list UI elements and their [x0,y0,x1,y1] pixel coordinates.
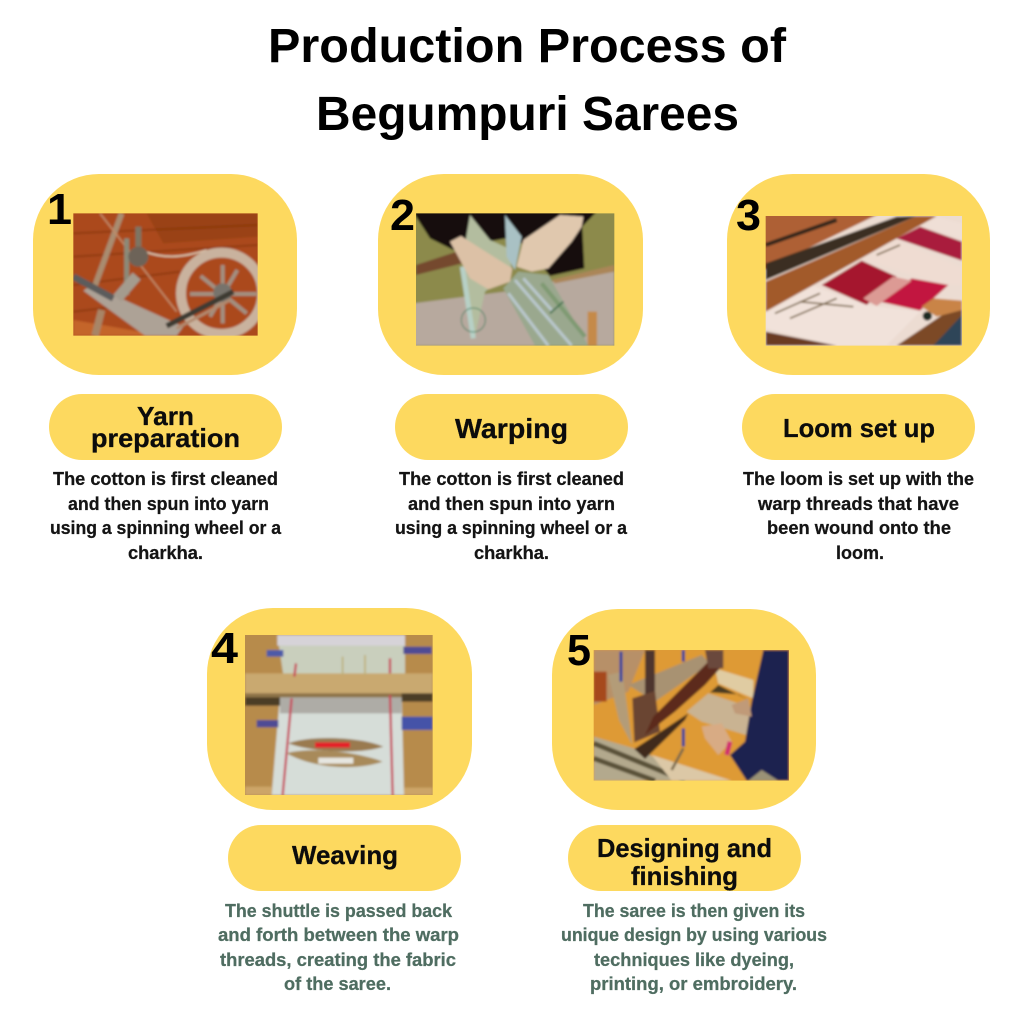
text: step 3 description: The loom is set up with the [743,469,974,489]
panel: step 1 yarn preparation [33,174,297,563]
card: step 4 [207,608,472,810]
panel: step 4 weaving [207,608,472,994]
photo: hands warping threads [413,210,617,348]
pill: Yarn preparation: Yarn [137,401,194,431]
panel: step 2 warping [378,174,643,563]
panel: step 5 designing and finishing [552,609,827,994]
pill: Weaving: Weaving [292,840,398,870]
text: step 2 description: charkha. [474,543,549,563]
number 2: 2 [390,191,415,240]
text: step 2 description: using a spinning wheel or a [395,518,628,538]
pill: Warping: Warping [455,413,568,444]
text: step 1 description: and then spun into yarn [68,494,269,514]
title: Begumpuri Sarees [316,88,739,141]
number 1: 1 [47,185,72,234]
pill: Designing and finishing: finishing [631,861,738,891]
pill: Loom set up: Loom set up [783,413,935,443]
text: step 4 description: threads, creating the fabric [220,950,456,970]
photo: weaver at wooden loom [592,648,792,782]
card: step 1 [33,174,297,375]
card: step 3 [727,174,990,375]
photo: loom with red and white cloth [763,213,965,348]
panel: step 3 loom set up [727,174,990,563]
text: step 1 description: using a spinning wheel or a [50,518,282,538]
text: step 3 description [743,469,974,563]
number 5: 5 [567,626,591,675]
number 4: 4 [211,624,239,673]
text: step 5 description: The saree is then given its [583,901,805,921]
pill: Yarn preparation [49,394,282,460]
text: step 3 description: loom. [836,543,884,563]
card: step 5 [552,609,816,810]
pill: Designing and finishing: Designing and [597,833,772,863]
text: step 5 description: printing, or embroidery. [590,974,797,994]
text: step 1 description: charkha. [128,543,203,563]
photo: spinning wheel [70,210,262,340]
text: step 4 description: and forth between the warp [218,925,459,945]
text: step 2 description: and then spun into yarn [408,494,615,514]
number 3: 3 [736,191,761,240]
text: step 2 description: The cotton is first cleaned [399,469,624,489]
text: step 4 description: The shuttle is passed back [225,901,453,921]
text: step 5 description: unique design by using various [561,925,827,945]
pill: Weaving [228,825,461,891]
text: step 3 description: warp threads that have [757,494,959,514]
text: step 5 description [561,901,827,994]
text: step 3 description: been wound onto the [767,518,951,538]
pill: Warping [395,394,628,460]
text: step 4 description [218,901,459,994]
pill: Designing and finishing [568,825,801,891]
text: step 1 description: The cotton is first cleaned [53,469,278,489]
title: Production Process of [268,20,787,73]
text: step 4 description: of the saree. [284,974,391,994]
text: step 1 description [50,469,282,563]
text: step 5 description: techniques like dyeing, [594,950,794,970]
card: step 2 [378,174,643,375]
title [268,20,787,141]
pill: Yarn preparation: preparation [91,423,240,453]
pill: Loom set up [742,394,975,460]
text: step 2 description [395,469,628,563]
photo: shuttles on woven fabric [242,632,437,798]
